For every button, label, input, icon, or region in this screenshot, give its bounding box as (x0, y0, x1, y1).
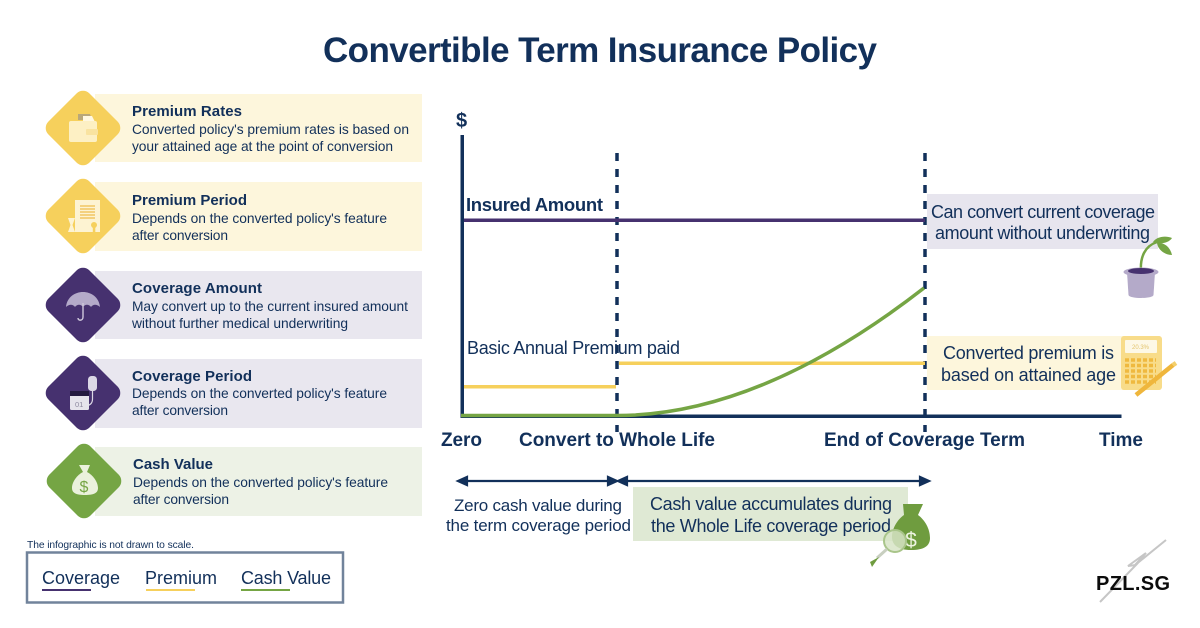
arrow: term period (458, 477, 617, 485)
icon: umbrella diamond (42, 264, 124, 346)
x axis (460, 414, 1122, 418)
text block: after conversion (132, 228, 228, 243)
callout: coverage (927, 194, 1172, 298)
panel: premium period (42, 175, 422, 257)
text: zero cash value: Zero cash value during (454, 496, 622, 515)
line: premium before conversion (464, 385, 616, 388)
callout: cash value accumulates: the Whole Life coverage period (651, 516, 891, 536)
logo: PZL.SG (1096, 573, 1170, 595)
y axis label: $ (456, 110, 467, 132)
logo (1096, 540, 1170, 602)
callout: premium: based on attained age (941, 365, 1116, 385)
heading: Coverage Period (132, 368, 252, 385)
icon: calculator and pencil (1121, 336, 1176, 395)
title: Convertible Term Insurance Policy (323, 31, 878, 70)
marker: end of coverage term (923, 153, 927, 432)
label: insured amount: Insured Amount (466, 194, 603, 215)
icon: calendar and drip diamond: 01 (75, 400, 83, 409)
line: insured amount (464, 218, 925, 222)
line: premium after conversion (619, 362, 925, 365)
text block: Depends on the converted policy's feature (132, 211, 387, 226)
icon: money bag and magnifier (870, 504, 930, 567)
legend: premium: Premium (145, 568, 217, 588)
axis label: zero: Zero (441, 430, 482, 451)
icon: calculator and pencil: 20.3% (1132, 345, 1150, 351)
text block: without further medical underwriting (131, 316, 348, 331)
panel: coverage amount (42, 264, 422, 346)
icon: wallet diamond (42, 87, 124, 169)
callout: premium (927, 336, 1176, 395)
icon: money bag and magnifier: $ (905, 529, 917, 552)
icon: document diamond (42, 175, 124, 257)
y axis (460, 135, 464, 418)
callout: coverage: Can convert current coverage (931, 202, 1155, 222)
heading: Cash Value (133, 456, 213, 473)
legend: coverage: Coverage (42, 568, 120, 588)
text block: Depends on the converted policy's feature (132, 386, 387, 401)
callout: cash value accumulates (633, 487, 930, 567)
text block: May convert up to the current insured amount (132, 299, 408, 314)
text block: Depends on the converted policy's feature (133, 475, 388, 490)
label: basic premium: Basic Annual Premium paid (467, 338, 680, 358)
legend (27, 552, 343, 602)
icon: money bag diamond (43, 440, 125, 522)
heading: Coverage Amount (132, 280, 262, 297)
axis label: convert: Convert to Whole Life (519, 430, 715, 451)
heading: Premium Rates (132, 103, 242, 120)
text block: after conversion (133, 492, 229, 507)
heading: Premium Period (132, 192, 247, 209)
text block: after conversion (132, 403, 228, 418)
text block: Converted policy's premium rates is based on (132, 122, 409, 137)
chart (441, 110, 1143, 451)
axis label: time: Time (1099, 430, 1143, 451)
arrow: whole life period (618, 477, 929, 485)
callout: premium: Converted premium is (943, 343, 1114, 363)
axis label: end of term: End of Coverage Term (824, 430, 1025, 451)
text block: your attained age at the point of conversion (132, 139, 393, 154)
panel: cash value (43, 440, 422, 522)
icon: calendar and drip diamond (42, 352, 124, 434)
callout: coverage: amount without underwriting (935, 223, 1150, 243)
legend: cash value: Cash Value (241, 568, 331, 588)
line: cash value (461, 288, 924, 416)
icon: money bag diamond: $ (80, 479, 89, 496)
note: The infographic is not drawn to scale. (27, 540, 194, 551)
callout: cash value accumulates: Cash value accumulates during (650, 494, 892, 514)
marker: convert to whole life (615, 153, 619, 432)
panel: coverage period (42, 352, 422, 434)
panel: premium rates (42, 87, 422, 169)
text: zero cash value: the term coverage period (446, 516, 631, 535)
icon: plant pot (1124, 237, 1172, 298)
